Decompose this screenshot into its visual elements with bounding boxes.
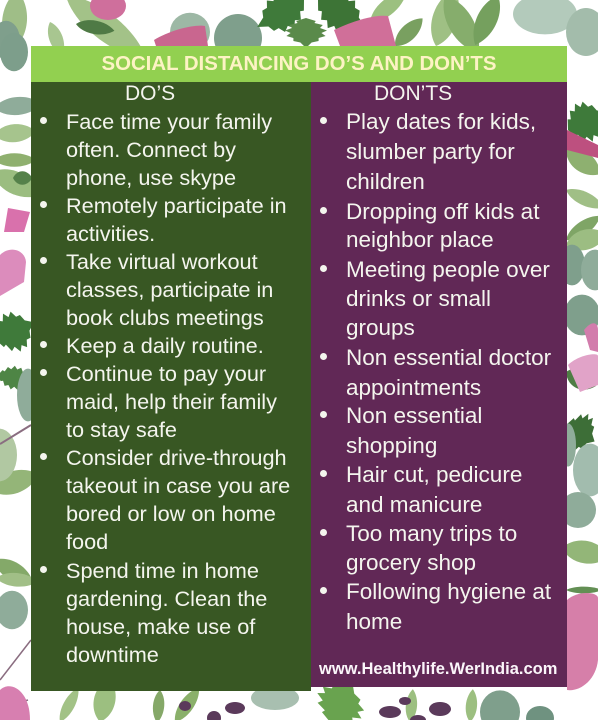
panel: don'ts: [311, 82, 567, 687]
do's list: house, make use of: [66, 614, 255, 639]
title: SOCIAL DISTANCING DO’S AND DON’TS: [102, 53, 496, 75]
do's list: Consider drive-through: [66, 445, 287, 470]
do's list: maid, help their family: [66, 389, 277, 414]
don'ts list: Too many trips to: [346, 521, 517, 546]
don'ts list: Dropping off kids at: [346, 199, 539, 224]
do's list: Continue to pay your: [66, 361, 266, 386]
do's list: [40, 109, 290, 667]
do's list: Remotely participate in: [66, 193, 287, 218]
don'ts list: Following hygiene at: [346, 579, 551, 604]
do's list: Face time your family: [66, 109, 272, 134]
don'ts list: Hair cut, pedicure: [346, 462, 522, 487]
right band: [556, 93, 598, 593]
do's list: food: [66, 529, 108, 554]
do's list: classes, participate in: [66, 277, 273, 302]
don'ts list: groups: [346, 315, 415, 340]
don'ts list: grocery shop: [346, 550, 476, 575]
don'ts list: Non essential: [346, 403, 482, 428]
website url: www.Healthylife.WerIndia.com: [319, 660, 557, 678]
don'ts heading: DON’TS: [374, 82, 452, 105]
top band: [0, 0, 507, 69]
do's heading: DO’S: [125, 82, 175, 105]
do's list: often. Connect by: [66, 137, 236, 162]
do's list: Take virtual workout: [66, 249, 258, 274]
don'ts list: home: [346, 609, 402, 634]
title banner: [31, 46, 567, 82]
do's list: gardening. Clean the: [66, 586, 267, 611]
don'ts list: Non essential doctor: [346, 345, 551, 370]
do's list: downtime: [66, 642, 159, 667]
don'ts list: drinks or small: [346, 286, 491, 311]
don'ts list: appointments: [346, 375, 481, 400]
don'ts list: shopping: [346, 433, 437, 458]
do's list: activities.: [66, 221, 155, 246]
left band: [0, 95, 46, 590]
don'ts list: [320, 109, 551, 634]
don'ts list: children: [346, 169, 425, 194]
do's list: phone, use skype: [66, 165, 236, 190]
don'ts list: Play dates for kids,: [346, 109, 536, 134]
do's list: Spend time in home: [66, 558, 259, 583]
don'ts list: neighbor place: [346, 227, 494, 252]
bottom band: [55, 670, 478, 720]
don'ts list: Meeting people over: [346, 257, 550, 282]
don'ts list: slumber party for: [346, 139, 515, 164]
do's list: bored or low on home: [66, 501, 276, 526]
do's list: Keep a daily routine.: [66, 333, 264, 358]
panel: do's: [31, 82, 311, 691]
do's list: book clubs meetings: [66, 305, 264, 330]
don'ts list: and manicure: [346, 492, 482, 517]
do's list: to stay safe: [66, 417, 177, 442]
do's list: takeout in case you are: [66, 473, 290, 498]
